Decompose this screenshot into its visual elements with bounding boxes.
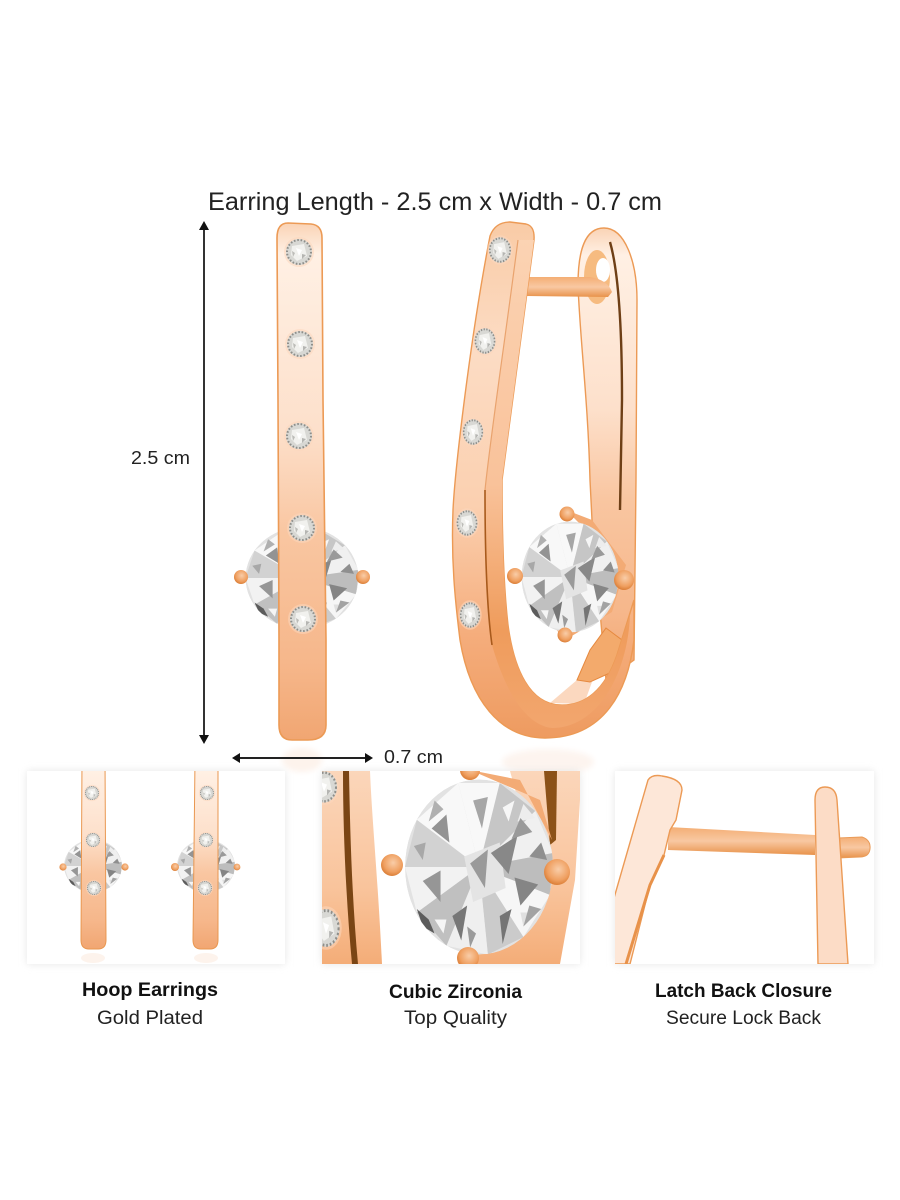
inner face of band — [485, 240, 630, 728]
label: length 2.5 cm: 2.5 cm — [131, 447, 190, 468]
earring: side view — [452, 222, 637, 738]
cubic zirconia stone: front view — [234, 527, 370, 629]
panel shadow — [615, 771, 874, 964]
hinge — [550, 628, 622, 704]
panel image: latch close-up — [612, 776, 870, 964]
label: width 0.7 cm: 0.7 cm — [384, 746, 443, 767]
accent stones: side band — [455, 235, 513, 630]
arrow: earring length — [199, 221, 209, 744]
caption: hoop earrings — [82, 980, 218, 1029]
caption: cubic zirconia: Cubic Zirconia — [389, 982, 522, 1003]
panel: cubic zirconia close-up — [309, 760, 580, 969]
caption: hoop earrings: Hoop Earrings — [82, 980, 218, 1001]
earring: front view — [234, 223, 370, 740]
caption: latch back closure: Latch Back Closure — [655, 981, 832, 1002]
caption: cubic zirconia — [389, 982, 522, 1029]
soft reflections under earrings — [282, 748, 594, 775]
caption: latch back closure — [655, 981, 832, 1029]
cubic zirconia stone: side view — [507, 506, 634, 642]
caption: hoop earrings: Gold Plated — [97, 1008, 203, 1029]
accent stones: front band — [284, 237, 318, 634]
dark crease line — [485, 490, 492, 645]
gold band: front view — [277, 223, 326, 740]
panel: latch back close-up — [612, 771, 874, 964]
caption: latch back closure: Secure Lock Back — [666, 1008, 821, 1029]
band crease line — [485, 240, 518, 490]
arrow: earring width — [232, 753, 373, 763]
caption: cubic zirconia: Top Quality — [404, 1008, 508, 1029]
panel: hoop earrings — [27, 760, 285, 964]
panel shadow — [27, 771, 285, 964]
back loop of the hoop — [578, 228, 637, 680]
latch pin — [526, 277, 612, 297]
gold band: side view — [452, 222, 634, 738]
panel image: stone close-up — [322, 771, 580, 964]
panel image: pair of earrings — [59, 760, 240, 963]
title: Earring Length - 2.5 cm x Width - 0.7 cm — [208, 188, 662, 216]
panel shadow — [322, 771, 580, 964]
